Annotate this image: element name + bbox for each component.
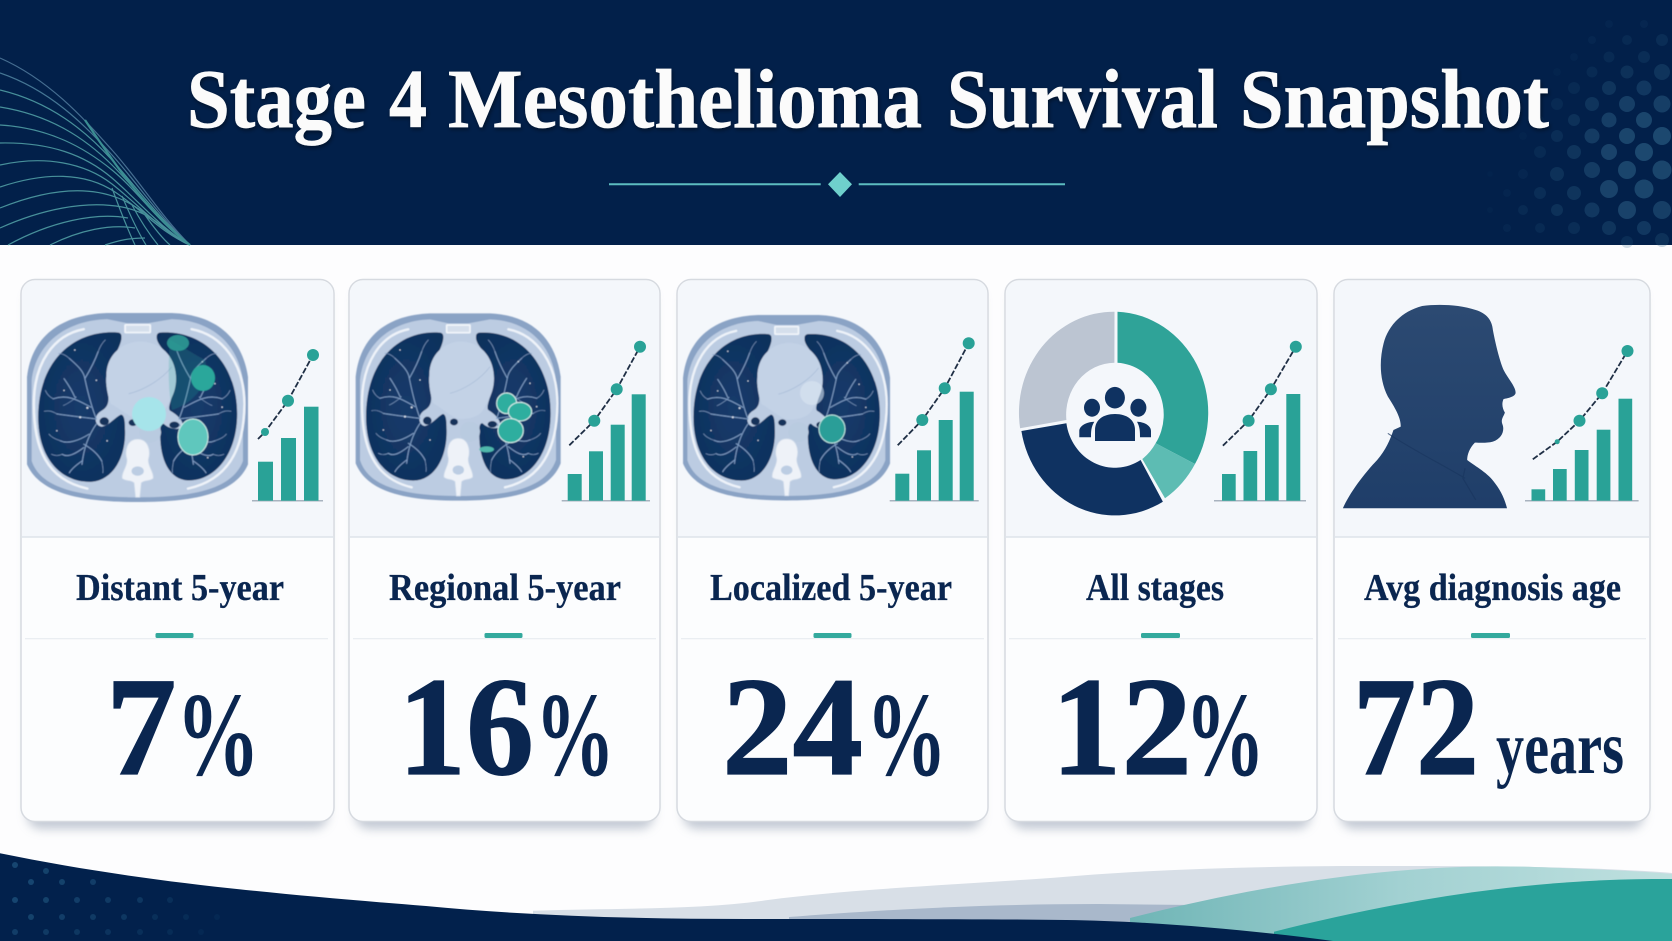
decorative navy dots xyxy=(12,862,220,935)
value: % xyxy=(535,668,615,801)
value xyxy=(722,649,947,805)
panel: Distant 5-year xyxy=(21,280,334,829)
panel: Avg diagnosis age xyxy=(1334,280,1650,829)
panel: Localized 5-year xyxy=(677,280,988,829)
value xyxy=(398,649,615,805)
title: Mesothelioma xyxy=(448,53,922,146)
value: 72 xyxy=(1353,649,1479,805)
accent bar xyxy=(156,633,194,638)
value: % xyxy=(176,668,260,801)
panel: All stages xyxy=(1005,280,1317,829)
value: 12 xyxy=(1051,649,1192,805)
icon: mini bar chart with trend line xyxy=(1525,345,1639,501)
value: years xyxy=(1496,707,1624,790)
value: % xyxy=(866,668,947,801)
title divider with diamond xyxy=(609,172,1065,197)
value: 7 xyxy=(106,649,176,805)
label: Regional 5-year xyxy=(389,567,621,609)
title: Survival xyxy=(947,53,1218,146)
value: 24 xyxy=(722,649,863,805)
donut chart xyxy=(1019,312,1208,515)
icon: lung scan with tumours xyxy=(27,313,248,502)
label: All stages xyxy=(1086,567,1224,609)
value xyxy=(106,649,260,805)
icon: mini bar chart with trend line xyxy=(562,341,650,501)
decorative halftone dots xyxy=(1487,20,1672,248)
icon: lung scan with small tumour xyxy=(683,315,890,500)
title xyxy=(187,53,1549,146)
value xyxy=(1051,649,1265,805)
panel: Regional 5-year xyxy=(349,280,660,829)
value xyxy=(1353,649,1624,805)
icon: lung scan with tumour xyxy=(356,313,561,501)
icon: mini bar chart with trend line xyxy=(890,337,979,501)
label: Distant 5-year xyxy=(76,567,284,609)
title: Snapshot xyxy=(1240,53,1549,146)
icon: mini bar chart with trend line xyxy=(1214,341,1306,501)
accent bar xyxy=(484,633,522,638)
title: Stage xyxy=(187,53,366,146)
icon: mini bar chart with trend line xyxy=(252,349,323,501)
icon: head and shoulders silhouette xyxy=(1343,305,1516,508)
icon: group of people xyxy=(1079,387,1151,441)
header band xyxy=(0,0,1672,248)
value: 16 xyxy=(398,649,534,805)
value: % xyxy=(1185,668,1265,801)
accent bar xyxy=(814,633,852,638)
accent bar xyxy=(1471,633,1510,638)
decorative wave lines xyxy=(0,58,190,245)
label: Avg diagnosis age xyxy=(1364,567,1621,609)
label: Localized 5-year xyxy=(710,567,952,609)
footer wave xyxy=(0,853,1672,941)
accent bar xyxy=(1141,633,1180,638)
title: 4 xyxy=(389,53,427,146)
